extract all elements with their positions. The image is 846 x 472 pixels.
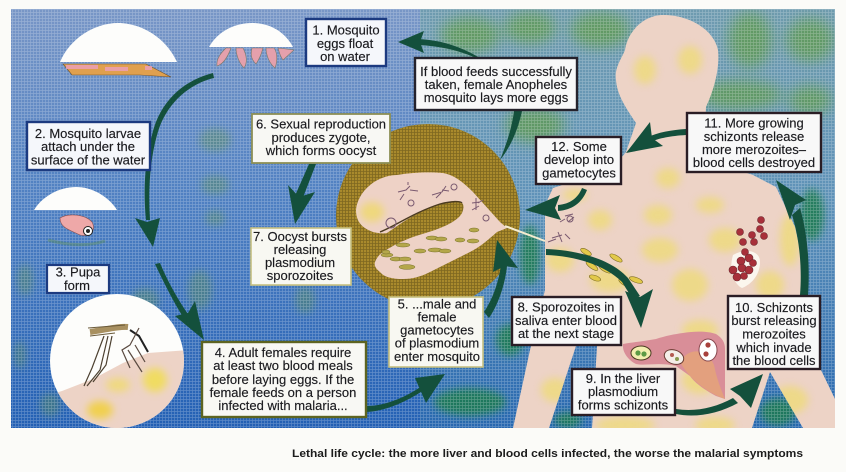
icon: liver cell with schizont 1	[631, 346, 651, 360]
human body silhouette	[500, 9, 840, 433]
box 4: adult females: 4. Adult females require	[215, 345, 351, 360]
box 4: adult females: before laying eggs. If the	[212, 372, 354, 387]
box 8: sporozoites in saliva	[512, 297, 621, 345]
box 9: liver schizonts: plasmodium	[588, 384, 658, 399]
box 5: gametocytes enter mosquito	[389, 296, 483, 367]
box II: more eggs: If blood feeds successfully	[420, 64, 572, 79]
box 4: adult females: infected with malaria...	[218, 398, 348, 413]
box 1: mosquito eggs: 1. Mosquito	[312, 22, 380, 38]
box 2: larvae: attach under the	[41, 139, 135, 154]
box II: more eggs: taken, female Anopheles	[425, 77, 568, 92]
box 7: oocyst bursts: releasing	[274, 242, 326, 257]
box 10: schizonts burst: which invade	[735, 340, 812, 355]
box 10: schizonts burst: 10. Schizonts	[735, 300, 814, 315]
arrow: box 11 to box 12	[626, 122, 686, 153]
sporozoites in gut	[381, 228, 479, 269]
box 7: oocyst bursts: 7. Oocyst bursts	[253, 229, 347, 244]
box 4: adult females: female feeds on a person	[210, 385, 356, 400]
arrow: adult feeding to gametocytes	[366, 374, 445, 412]
box 9: liver schizonts	[572, 369, 675, 415]
merozoites and burst blood cell	[729, 216, 768, 288]
arrow: lays eggs to box 1	[398, 31, 480, 58]
box 11: more growing schizonts	[687, 113, 821, 172]
box 2: larvae: 2. Mosquito larvae	[35, 126, 141, 141]
box 11: more growing schizonts: blood cells destroyed	[693, 155, 815, 170]
box 6: zygote: 6. Sexual reproduction	[256, 116, 386, 132]
box 5: gametocytes enter mosquito: 5. ...male and	[398, 296, 476, 312]
water dome: eggs	[209, 23, 294, 68]
arrow: box 9 to box 10	[676, 374, 763, 416]
box 5: gametocytes enter mosquito: of plasmodium	[395, 336, 479, 350]
box 7: oocyst bursts	[251, 228, 351, 285]
box 9: liver schizonts: forms schizonts	[578, 398, 669, 412]
arrow: gametocytes into mosquito	[484, 240, 518, 318]
box 10: schizonts burst	[728, 296, 820, 369]
box 3: pupa: 3. Pupa	[56, 264, 101, 280]
gametocytes in gut	[386, 182, 489, 228]
box 9: liver schizonts: 9. In the liver	[586, 371, 661, 386]
box 12: gametocytes: develop into	[544, 152, 614, 167]
box 8: sporozoites in saliva: saliva enter blood	[515, 313, 617, 328]
box 5: gametocytes enter mosquito: female	[417, 310, 457, 324]
box 6: zygote: which forms oocyst	[265, 143, 377, 158]
gut U shape	[356, 172, 507, 279]
arrow: sporozoites to liver	[546, 249, 653, 328]
icon: liver cell with schizont 2	[662, 347, 686, 367]
box 1: mosquito eggs: eggs float	[317, 36, 374, 51]
box 4: adult females: at least two blood meals	[213, 358, 353, 373]
box 4: adult females	[202, 342, 366, 417]
box 8: sporozoites in saliva: at the next stage	[518, 326, 614, 341]
box 10: schizonts burst: the blood cells	[732, 353, 816, 368]
box 7: oocyst bursts: sporozoites	[267, 268, 334, 283]
box 12: gametocytes: gametocytes	[542, 166, 616, 180]
box 11: more growing schizonts: schizonts release	[704, 129, 804, 144]
box 1: mosquito eggs: on water	[320, 49, 371, 64]
sporozoites in the blood	[580, 247, 643, 289]
arrow: pupa to adult	[155, 263, 204, 340]
caption: Lethal life cycle: the more liver and blood cells infected, the worse the malarial symptoms	[292, 448, 803, 460]
arrow: box 6 to box 7	[288, 164, 316, 224]
box 12: gametocytes: 12. Some	[551, 139, 607, 154]
proboscis line	[505, 226, 545, 241]
box II: more eggs	[415, 58, 577, 110]
water dome: larvae	[60, 23, 177, 77]
arrow: larvae to pupa	[135, 73, 214, 247]
box II: more eggs: mosquito lays more eggs	[424, 90, 569, 105]
oocyst circle in mosquito gut	[336, 124, 545, 308]
box 8: sporozoites in saliva: 8. Sporozoites in	[518, 300, 614, 314]
box 1: mosquito eggs	[306, 19, 386, 66]
arrow: oocyst to more eggs	[500, 111, 522, 160]
box 11: more growing schizonts: more merozoites–	[702, 142, 807, 157]
box 2: larvae: surface of the water	[31, 152, 146, 168]
box 7: oocyst bursts: plasmodium	[265, 255, 335, 270]
gametocytes near chest	[548, 214, 574, 242]
box 3: pupa: form	[64, 278, 90, 293]
box 6: zygote: produces zygote,	[271, 130, 371, 145]
water dome: pupa	[34, 187, 117, 245]
box 5: gametocytes enter mosquito: gametocytes	[400, 322, 474, 338]
liver	[623, 332, 725, 399]
box 12: gametocytes	[536, 137, 621, 184]
box 10: schizonts burst: merozoites	[742, 326, 806, 342]
box 6: zygote	[252, 114, 390, 163]
arrow: box 12 to gut	[525, 188, 587, 220]
mosquito	[84, 325, 148, 386]
box 5: gametocytes enter mosquito: enter mosquito	[394, 349, 480, 364]
mosquito biting skin vignette	[45, 294, 190, 430]
arrow: box 10 to box 11	[776, 180, 809, 295]
box 2: larvae	[27, 122, 150, 170]
icon: liver cell with schizont 3	[699, 339, 717, 361]
box 11: more growing schizonts: 11. More growing	[704, 116, 804, 130]
box 10: schizonts burst: burst releasing	[731, 313, 817, 328]
box 3: pupa	[47, 264, 109, 293]
